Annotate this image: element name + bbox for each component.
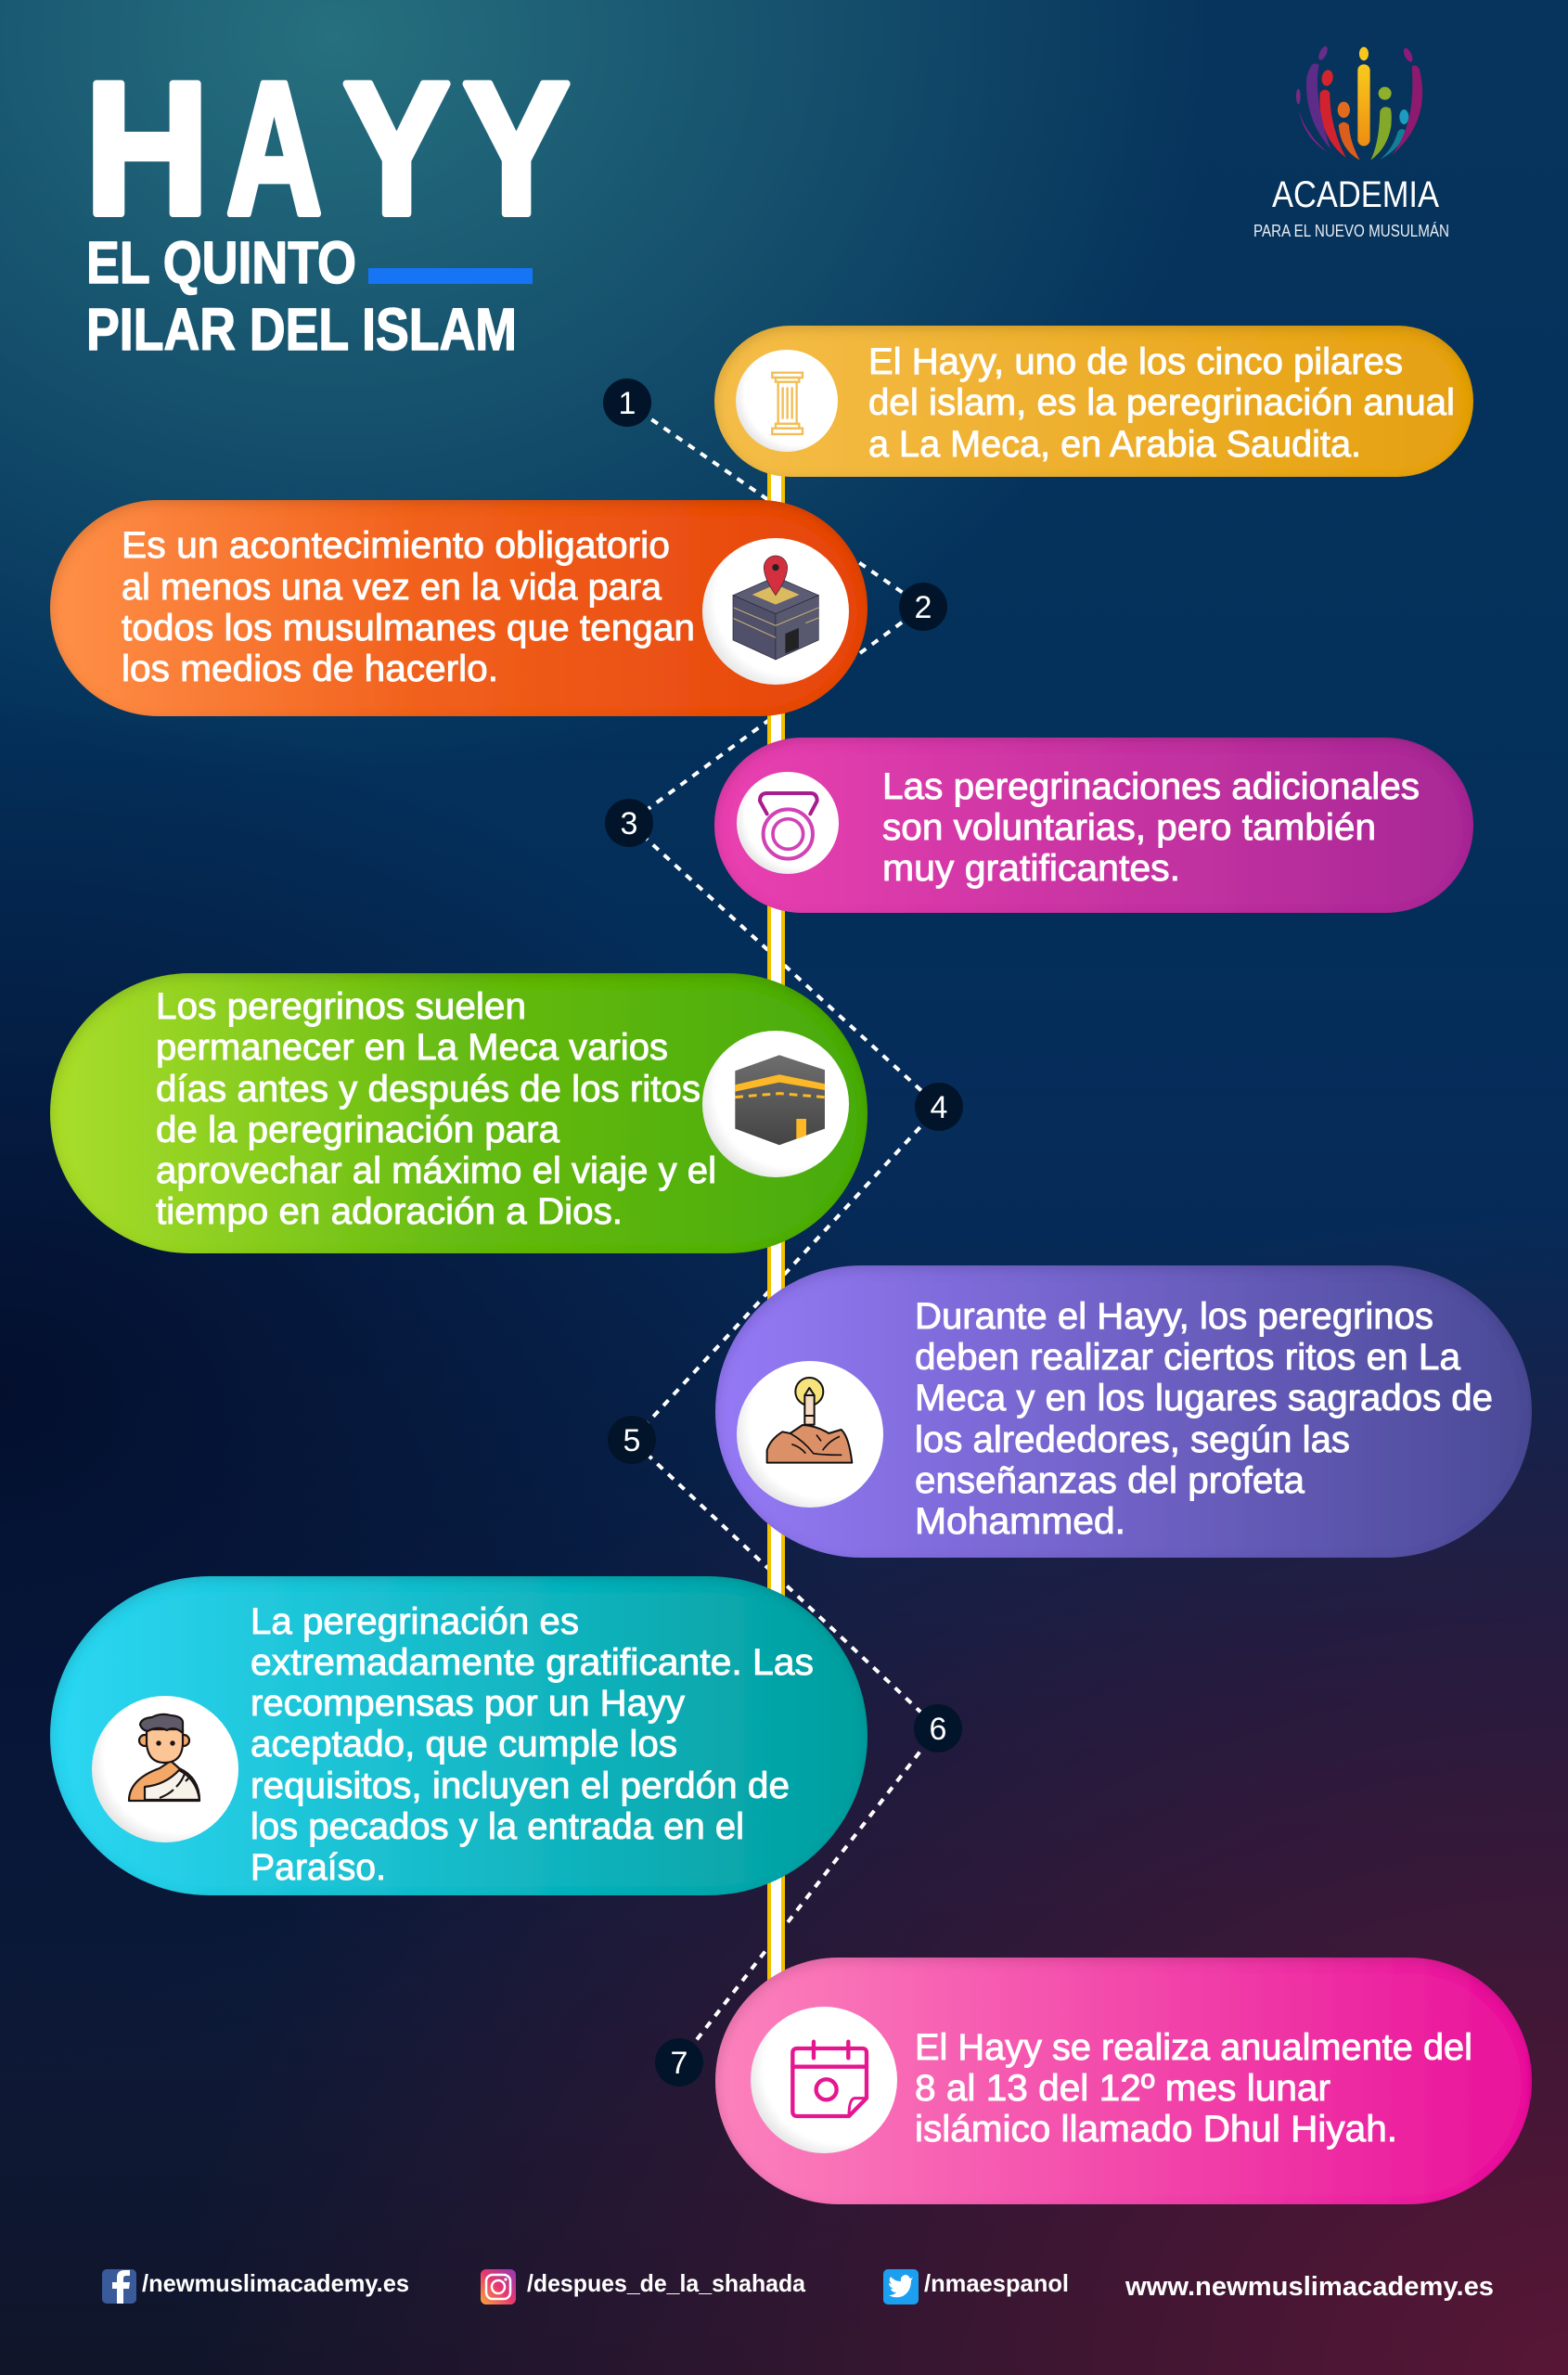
- panel 5 text: Durante el Hayy, los peregrinos: [915, 1296, 1433, 1337]
- website: www.newmuslimacademy.es: [1125, 2272, 1494, 2302]
- icon: pillar: [772, 373, 803, 434]
- badge 2: [899, 583, 947, 631]
- panel 5: purple: [715, 1265, 1532, 1558]
- panel 4 text: permanecer en La Meca varios: [156, 1027, 668, 1068]
- panel 2: orange: [50, 500, 868, 716]
- icon: minaret on mountain: [767, 1378, 852, 1463]
- badge 1: 1: [619, 386, 636, 421]
- title: HAYY: H: [85, 44, 210, 254]
- panel 4 text: de la peregrinación para: [156, 1110, 560, 1150]
- panel 2 text: [122, 525, 695, 689]
- central vertical timeline: [767, 464, 785, 1985]
- panel 6: cyan: [50, 1576, 868, 1895]
- facebook handle: /newmuslimacademy.es: [142, 2269, 409, 2297]
- panel 7 text: islámico llamado Dhul Hiyah.: [915, 2109, 1397, 2150]
- panel 4 text: tiempo en adoración a Dios.: [156, 1191, 623, 1232]
- subtitle line: PILAR DEL ISLAM: PILAR DEL ISLAM: [86, 296, 517, 363]
- panel 7 text: El Hayy se realiza anualmente del: [915, 2027, 1472, 2068]
- panel 1 text: El Hayy, uno de los cinco pilares: [868, 341, 1403, 382]
- panel 6 text: requisitos, incluyen el perdón de: [251, 1765, 790, 1806]
- badge 4: 4: [931, 1090, 947, 1125]
- logo word: ACADEMIA: ACADEMIA: [1272, 174, 1439, 215]
- badge 4: [915, 1083, 963, 1131]
- panel 2 text: Es un acontecimiento obligatorio: [122, 525, 670, 566]
- panel 4 text: Los peregrinos suelen: [156, 986, 526, 1027]
- dotted connectors: [627, 403, 939, 2062]
- logo: Academia: [1253, 45, 1449, 240]
- badge 6: [914, 1704, 962, 1752]
- panel 2 text: al menos una vez en la vida para: [122, 567, 662, 608]
- icon: instagram: [481, 2269, 516, 2304]
- badge 3: [605, 799, 653, 847]
- icon: kaaba with pin: [733, 556, 818, 660]
- panel 3 text: son voluntarias, pero también: [882, 807, 1376, 848]
- icon: facebook: [102, 2269, 136, 2304]
- panel 5 text: los alrededores, según las: [915, 1419, 1350, 1460]
- badge 7: 7: [671, 2046, 688, 2081]
- panel 6 text: Paraíso.: [251, 1847, 386, 1888]
- badge 3: 3: [621, 806, 637, 841]
- panel 6 text: los pecados y la entrada en el: [251, 1806, 744, 1847]
- panel 4 text: aprovechar al máximo el viaje y el: [156, 1150, 716, 1191]
- panel 4 text: [156, 986, 716, 1232]
- panel 2 text: los medios de hacerlo.: [122, 648, 498, 689]
- panel 7 text: [915, 2027, 1472, 2150]
- title block: [85, 44, 570, 363]
- logo tagline: PARA EL NUEVO MUSULMÁN: [1253, 222, 1449, 240]
- panel 3 text: muy gratificantes.: [882, 848, 1180, 889]
- title: HAYY: Y: [343, 44, 450, 254]
- icon: pilgrim: [129, 1714, 199, 1801]
- title: HAYY: A: [226, 44, 322, 254]
- badge 5: 5: [623, 1423, 640, 1458]
- panel 3 text: Las peregrinaciones adicionales: [882, 766, 1420, 807]
- number badges: [603, 379, 963, 2086]
- panel 1 text: a La Meca, en Arabia Saudita.: [868, 424, 1361, 465]
- footer: [102, 2269, 1494, 2304]
- icon: medal: [760, 793, 817, 859]
- panel 1 text: [868, 341, 1455, 465]
- panel 4 text: días antes y después de los ritos: [156, 1069, 700, 1110]
- icon: twitter: [883, 2269, 919, 2304]
- panel 5 text: Meca y en los lugares sagrados de: [915, 1378, 1493, 1419]
- subtitle line: EL QUINTO: EL QUINTO: [86, 229, 356, 296]
- panel 1 text: del islam, es la peregrinación anual: [868, 382, 1455, 423]
- badge 5: [608, 1416, 656, 1464]
- blue accent bar: [368, 268, 533, 284]
- panel 6 text: La peregrinación es: [251, 1601, 579, 1642]
- panel 3 text: [882, 766, 1420, 889]
- badge 6: 6: [930, 1712, 946, 1747]
- panel 3: magenta: [714, 738, 1473, 913]
- panel 6 text: extremadamente gratificante. Las: [251, 1642, 814, 1683]
- icon: calendar: [792, 2042, 867, 2116]
- icon: kaaba: [735, 1055, 825, 1145]
- badge 2: 2: [915, 590, 932, 625]
- panel 6 text: [251, 1601, 814, 1888]
- panel 7: pink: [715, 1958, 1532, 2204]
- panel 6 text: recompensas por un Hayy: [251, 1683, 685, 1724]
- panel 5 text: [915, 1296, 1493, 1542]
- badge 7: [655, 2038, 703, 2086]
- twitter handle: /nmaespanol: [924, 2269, 1069, 2297]
- instagram handle: /despues_de_la_shahada: [527, 2269, 806, 2297]
- badge 1: [603, 379, 651, 427]
- panel 6 text: aceptado, que cumple los: [251, 1724, 677, 1765]
- panel 5 text: Mohammed.: [915, 1501, 1125, 1542]
- panel 4: green: [50, 973, 868, 1253]
- panel 5 text: deben realizar ciertos ritos en La: [915, 1337, 1461, 1378]
- panel 1: yellow: [714, 326, 1473, 477]
- panel 2 text: todos los musulmanes que tengan: [122, 608, 695, 648]
- title: HAYY: Y: [463, 44, 570, 254]
- panel 5 text: enseñanzas del profeta: [915, 1460, 1305, 1501]
- logo mark: colored figures: [1296, 45, 1422, 160]
- panel 7 text: 8 al 13 del 12º mes lunar: [915, 2068, 1330, 2109]
